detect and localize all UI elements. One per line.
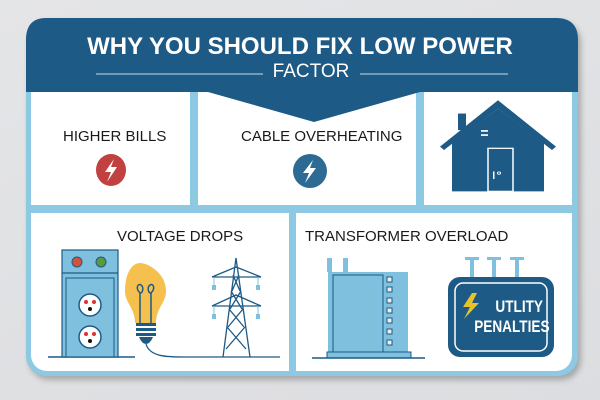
icon: utility penalties box xyxy=(448,257,554,357)
title: WHY YOU SHOULD FIX LOW POWER xyxy=(87,33,513,60)
panel: transformer overload xyxy=(296,213,572,371)
icon: house xyxy=(440,100,556,192)
icon: transformer xyxy=(312,258,425,359)
panel: cable overheating xyxy=(198,92,416,205)
icon: blue bolt xyxy=(293,154,327,188)
icon: red bolt xyxy=(96,154,126,186)
text: utility penalties: PENALTIES xyxy=(474,317,550,336)
heading: higher bills: HIGHER BILLS xyxy=(63,128,166,145)
panel: voltage drops xyxy=(31,213,289,371)
text: utility penalties xyxy=(474,297,550,336)
header banner xyxy=(26,18,578,122)
icon: socket panel, bulb, tower xyxy=(48,249,280,358)
heading: cable overheating: CABLE OVERHEATING xyxy=(241,128,402,145)
panel: higher bills xyxy=(31,92,190,205)
subtitle: FACTOR xyxy=(273,61,349,82)
heading: voltage drops: VOLTAGE DROPS xyxy=(117,228,243,245)
text: utility penalties: UTLITY xyxy=(495,297,543,316)
panel: house xyxy=(424,92,572,205)
heading: transformer overload: TRANSFORMER OVERLOAD xyxy=(305,228,508,245)
